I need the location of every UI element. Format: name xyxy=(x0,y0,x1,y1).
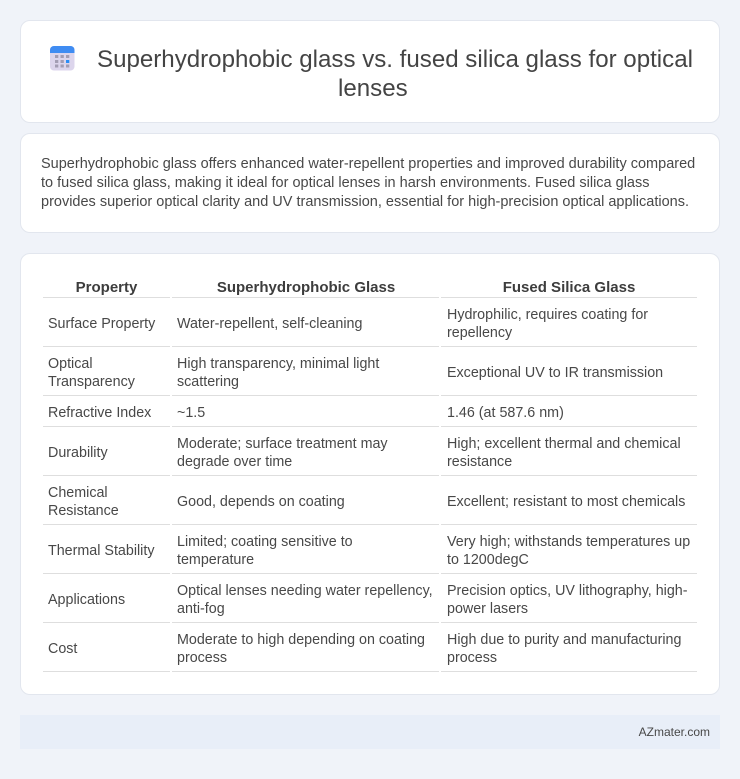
row: durability: degrade over time xyxy=(177,454,292,470)
row: optical transparency: Transparency xyxy=(48,374,135,390)
table header row: Property xyxy=(76,279,137,296)
intro paragraph xyxy=(41,156,695,210)
row: surface property: Surface Property xyxy=(48,316,155,332)
row: thermal stability: to 1200degC xyxy=(447,552,529,568)
row: cost: process xyxy=(447,650,497,666)
intro paragraph: provides superior optical clarity and UV transmission, essential for high-precision optical applications. xyxy=(41,194,689,210)
footer credit: AZmater.com xyxy=(639,725,710,739)
row: optical transparency: High transparency, minimal light xyxy=(177,356,379,372)
comparison table xyxy=(43,279,697,672)
row: optical transparency: Optical xyxy=(48,356,92,372)
row: applications: anti-fog xyxy=(177,601,225,617)
row: surface property: repellency xyxy=(447,325,512,341)
row: surface property: Hydrophilic, requires coating for xyxy=(447,307,648,323)
footer bar xyxy=(20,715,720,749)
header card xyxy=(20,20,720,123)
title: Superhydrophobic glass vs. fused silica glass for optical xyxy=(97,46,693,73)
row: durability: resistance xyxy=(447,454,512,470)
intro paragraph: Superhydrophobic glass offers enhanced water-repellent properties and improved durability compared xyxy=(41,156,695,172)
row: thermal stability: Thermal Stability xyxy=(48,543,154,559)
row: cost xyxy=(48,632,681,666)
row: refractive index: Refractive Index xyxy=(48,405,151,421)
row: optical transparency xyxy=(48,356,663,390)
row: cost: process xyxy=(177,650,227,666)
row: applications: Optical lenses needing water repellency, xyxy=(177,583,433,599)
header card: lenses xyxy=(338,75,408,102)
row: chemical resistance: Resistance xyxy=(48,503,119,519)
row: thermal stability: Limited; coating sensitive to xyxy=(177,534,353,550)
row: optical transparency: Exceptional UV to IR transmission xyxy=(447,365,663,381)
title xyxy=(97,46,693,102)
row: durability: Moderate; surface treatment may xyxy=(177,436,388,452)
row: durability xyxy=(48,436,681,470)
comparison table panel xyxy=(20,253,720,695)
row: durability: High; excellent thermal and chemical xyxy=(447,436,681,452)
intro paragraph: to fused silica glass, making it ideal for optical lenses in harsh environments. Fused silica glass xyxy=(41,175,649,191)
intro text panel xyxy=(20,133,720,233)
row: applications: power lasers xyxy=(447,601,528,617)
table header row: Superhydrophobic Glass xyxy=(217,279,395,296)
row: cost: Moderate to high depending on coating xyxy=(177,632,425,648)
row: cost: Cost xyxy=(48,641,77,657)
row: applications xyxy=(48,583,688,617)
row: durability: Durability xyxy=(48,445,108,461)
row: surface property: Water-repellent, self-cleaning xyxy=(177,316,362,332)
row: applications: Precision optics, UV lithography, high- xyxy=(447,583,688,599)
row: chemical resistance: Chemical xyxy=(48,485,108,501)
row: refractive index xyxy=(48,405,564,421)
table header row: Fused Silica Glass xyxy=(503,279,635,296)
row: cost: High due to purity and manufacturing xyxy=(447,632,681,648)
icon: calendar xyxy=(50,46,74,70)
row: thermal stability xyxy=(48,534,690,568)
row: refractive index: ~1.5 xyxy=(177,405,205,421)
row: surface property xyxy=(48,307,648,341)
row: thermal stability: Very high; withstands temperatures up xyxy=(447,534,690,550)
table header row xyxy=(76,279,635,296)
row: thermal stability: temperature xyxy=(177,552,254,568)
row: optical transparency: scattering xyxy=(177,374,239,390)
row: chemical resistance: Excellent; resistant to most chemicals xyxy=(447,494,685,510)
row: chemical resistance: Good, depends on coating xyxy=(177,494,345,510)
row: applications: Applications xyxy=(48,592,125,608)
row: refractive index: 1.46 (at 587.6 nm) xyxy=(447,405,564,421)
row: chemical resistance xyxy=(48,485,685,519)
